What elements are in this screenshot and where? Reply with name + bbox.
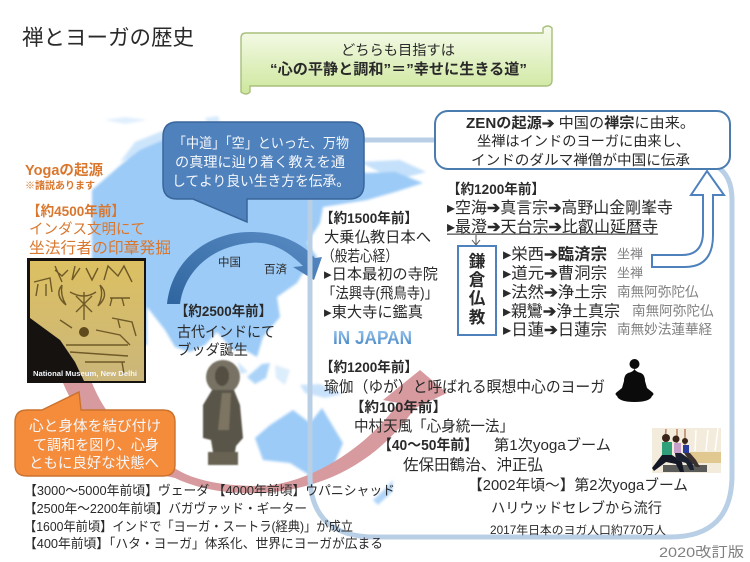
kamakura sects: ▸法然➔浄土宗 (503, 284, 607, 302)
seal photo: National Museum, New Delhi (33, 369, 137, 378)
2500 years ago (175, 303, 275, 359)
kamakura sects: ▸道元➔曹洞宗 (503, 264, 607, 282)
kamakura box: 仏 (469, 289, 486, 308)
japan yoga history: 第1次yogaブーム (494, 436, 611, 454)
japan yoga history: 【約100年前】 (350, 399, 447, 415)
yoga origin: 坐法行者の印章発掘 (29, 239, 171, 257)
1500 years ago: 【約1500年前】 (320, 210, 418, 226)
yoga classics timeline: 【2500年～2200年前頃】バガヴァッド・ギーター (24, 500, 307, 516)
2500 years ago: 古代インドにて (177, 324, 275, 341)
yoga origin: Yogaの起源 (25, 162, 103, 179)
1500 years ago: ▸東大寺に鑑真 (324, 303, 423, 321)
speech bubble: blue: の真理に辿り着く教えを通 (175, 154, 345, 170)
kamakura sects: 坐禅 (617, 246, 643, 262)
kamakura sects: 南無阿弥陀仏 (632, 304, 714, 318)
1200 years ago sects: 【約1200年前】 (447, 181, 545, 197)
down arrow (472, 235, 480, 245)
yoga classics timeline: 【1600年前頃】インドで「ヨーガ・スートラ(経典)」が成立 (24, 518, 353, 534)
blue arc arrow (167, 232, 322, 304)
zen origin box: インドのダルマ禅僧が中国に伝承 (471, 153, 690, 169)
kamakura sects: 坐禅 (617, 266, 643, 280)
up arrow (652, 171, 724, 267)
map labels: 中国 (218, 256, 241, 269)
speech bubble: blue: 「中道」「空」といった、万物 (173, 135, 349, 151)
japan yoga history: 瑜伽（ゆが）と呼ばれる瞑想中心のヨーガ (324, 378, 605, 396)
1200 years ago sects: ▸空海➔真言宗➔高野山金剛峯寺 (447, 199, 673, 217)
japan yoga history: 【2002年頃～】第2次yogaブーム (468, 476, 688, 494)
kamakura sects: ▸栄西➔臨済宗 (503, 244, 607, 264)
kamakura box: 鎌 (469, 252, 486, 271)
kamakura sects: ▸日蓮➔日蓮宗 (503, 321, 607, 339)
1500 years ago: 「法興寺(飛鳥寺)」 (322, 284, 438, 302)
in japan: IN JAPAN (333, 328, 412, 348)
seal photo (27, 258, 146, 383)
scroll banner (241, 26, 552, 94)
map labels: 百済 (264, 263, 287, 276)
yoga class photo (652, 428, 721, 473)
1500 years ago (320, 210, 438, 321)
2500 years ago: 【約2500年前】 (175, 303, 272, 319)
zen origin box: ZENの起源➔ 中国の禅宗に由来。 (466, 114, 695, 132)
kamakura sects: 南無妙法蓮華経 (617, 322, 713, 337)
orange speech bubble (15, 392, 175, 476)
japan yoga history (320, 359, 688, 537)
zen origin box (435, 111, 730, 169)
1500 years ago: 大乗仏教日本へ (324, 229, 431, 246)
1200 years ago sects (447, 181, 673, 236)
japan yoga history: 中村天風「心身統一法」 (354, 418, 514, 435)
yoga origin: インダス文明にて (29, 221, 145, 238)
1500 years ago: （般若心経） (322, 248, 398, 265)
kamakura sects: 南無阿弥陀仏 (617, 284, 699, 300)
background world map (92, 116, 426, 505)
kamakura box: 教 (469, 308, 486, 327)
japan yoga history: ハリウッドセレブから流行 (491, 499, 662, 517)
map labels (218, 256, 287, 276)
zen origin box: 坐禅はインドのヨーガに由来し、 (477, 134, 690, 150)
yoga classics timeline: 【400年前頃】「ハタ・ヨーガ」体系化、世界にヨーガが広まる (24, 535, 383, 551)
kamakura box: 倉 (469, 270, 486, 290)
orange speech bubble: 心と身体を結び付け (29, 418, 161, 435)
japan yoga history: 【40～50年前】 (378, 436, 478, 454)
orange speech bubble: ともに良好な状態へ (29, 455, 159, 472)
revision note: 2020改訂版 (659, 544, 744, 560)
1500 years ago: ▸日本最初の寺院 (324, 266, 438, 283)
2500 years ago: ブッダ誕生 (177, 341, 248, 359)
speech bubble: blue (163, 122, 364, 222)
yoga classics timeline: 【3000～5000年前頃】ヴェーダ 【4000年前頃】ウパニシャッド (24, 482, 395, 498)
kamakura sects (503, 244, 714, 339)
yoga origin: 【約4500年前】 (27, 203, 125, 219)
yoga classics timeline (24, 482, 395, 551)
japan yoga history: 【約1200年前】 (320, 359, 418, 375)
yoga origin (25, 162, 171, 257)
yoga origin: ※諸説あります (25, 179, 95, 192)
red timeline arc (63, 370, 447, 493)
japan yoga history: 佐保田鶴治、沖正弘 (403, 456, 543, 474)
scroll banner: “心の平静と調和”＝”幸せに生きる道” (270, 60, 527, 78)
japan yoga history: 2017年日本のヨガ人口約770万人 (490, 523, 667, 537)
icon: meditating figure (616, 359, 654, 402)
1200 years ago sects: ▸最澄➔天台宗➔比叡山延暦寺 (447, 218, 658, 236)
buddha statue (203, 360, 243, 465)
speech bubble: blue: してより良い生き方を伝承。 (172, 173, 350, 189)
orange speech bubble: て調和を図り、心身 (33, 437, 159, 454)
title: 禅とヨーガの歴史 (22, 26, 194, 50)
light blue frame line (310, 140, 732, 537)
scroll banner: どちらも目指すは (341, 42, 455, 58)
kamakura sects: ▸親鸞➔浄土真宗 (503, 302, 620, 320)
kamakura box (458, 246, 496, 335)
